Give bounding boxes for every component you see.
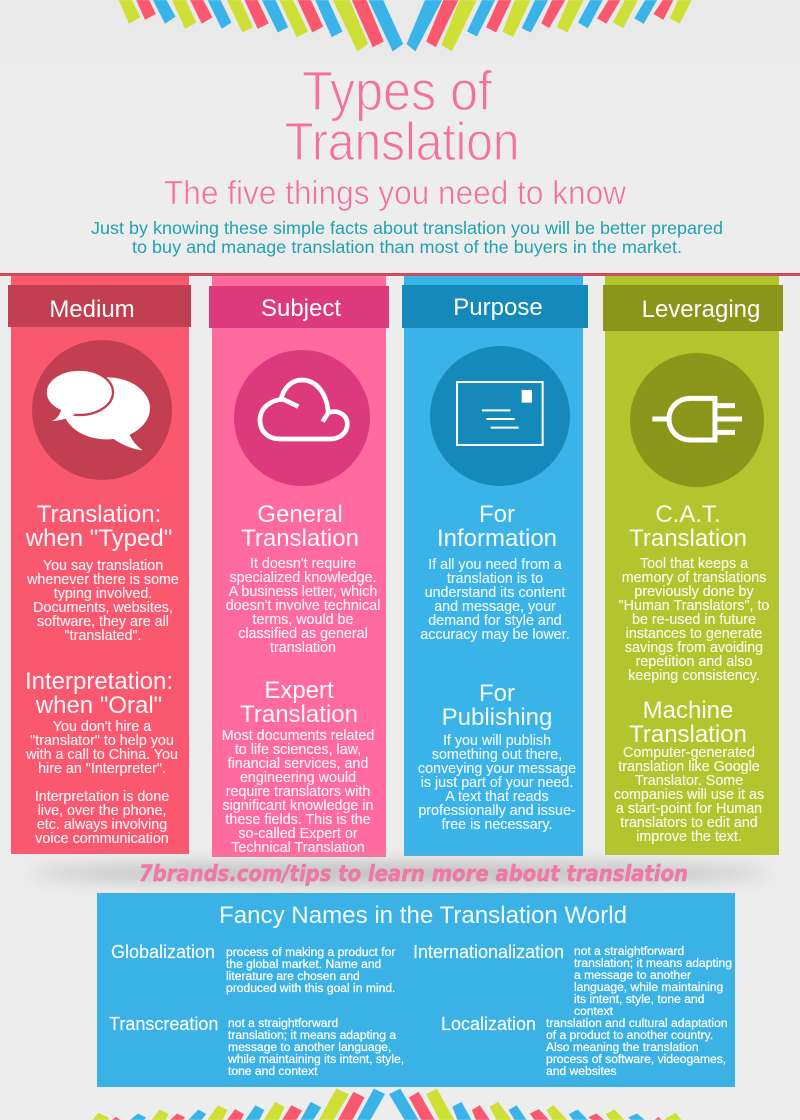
bottom ribbon decoration: [92, 1088, 682, 1120]
term: internationalization: language, while maintaining: [574, 980, 723, 994]
title: Types of: [302, 59, 492, 122]
term: globalization: the global market. Name and: [226, 957, 381, 971]
text: expert translation: so-called Expert or: [238, 826, 358, 842]
text: cat translation: previously done by: [634, 584, 754, 600]
text: expert translation: [222, 677, 374, 856]
term: transcreation: [109, 1014, 404, 1078]
term: internationalization: context: [574, 1004, 614, 1018]
text: expert translation: require translators with: [226, 784, 370, 800]
text: machine translation: Machine: [643, 697, 733, 724]
term: localization: of a product to another country.: [546, 1028, 713, 1042]
text: interpretation when oral: live, over the phone,: [38, 803, 166, 819]
text: translation when typed: "translated".: [65, 628, 141, 644]
text: cat translation: Tool that keeps a: [640, 556, 748, 572]
text: translation when typed: when "Typed": [25, 525, 172, 552]
term: globalization: Globalization: [111, 942, 215, 962]
text: for publishing: Publishing: [442, 704, 552, 731]
term: localization: Localization: [441, 1014, 536, 1034]
term: internationalization: its intent, style, tone and: [574, 992, 704, 1006]
text: machine translation: Computer-generated: [623, 745, 755, 761]
top ribbon decoration: [118, 0, 692, 52]
term: globalization: produced with this goal in mind.: [226, 981, 395, 995]
text: expert translation: Technical Translation: [231, 840, 365, 856]
text: interpretation when oral: voice communication: [35, 831, 169, 847]
text: translation when typed: [25, 501, 179, 644]
text: general translation: classified as general: [238, 626, 368, 642]
term: transcreation: Transcreation: [109, 1014, 218, 1034]
icon: cloud: [234, 350, 370, 486]
text: for publishing: conveying your message: [418, 761, 576, 777]
text: expert translation: to life sciences, law,: [235, 742, 361, 758]
text: for information: and message, your: [434, 599, 556, 615]
term: localization: translation and cultural adaptation: [546, 1016, 728, 1030]
text: expert translation: these fields. This is the: [225, 812, 371, 828]
text: for information: [420, 501, 570, 643]
text: for information: If all you need from a: [428, 557, 562, 573]
subtitle: The five things you need to know: [164, 174, 626, 211]
text: machine translation: Translator. Some: [635, 773, 743, 789]
panel: purpose: [402, 276, 588, 856]
text: translation when typed: software, they are all: [37, 614, 169, 630]
title: [284, 59, 520, 172]
text: cat translation: repetition and also: [636, 654, 752, 670]
heading: leveraging: [603, 285, 783, 331]
heading: purpose: Purpose: [453, 294, 543, 321]
text: general translation: A business letter, which: [229, 584, 377, 600]
text: machine translation: a start-point for Human: [616, 801, 762, 817]
text: machine translation: improve the text.: [636, 829, 742, 845]
text: general translation: It doesn't require: [250, 556, 356, 572]
text: interpretation when oral: with a call to China. You: [25, 747, 178, 763]
text: for information: For: [479, 501, 515, 528]
text: for information: translation is to: [447, 571, 543, 587]
text: expert translation: Most documents related: [222, 728, 374, 744]
term: localization: Also meaning the translation: [546, 1040, 699, 1054]
term: transcreation: tone and context: [228, 1064, 318, 1078]
text: expert translation: significant knowledge in: [222, 798, 374, 814]
text: for information: accuracy may be lower.: [420, 627, 570, 643]
panel: medium: [8, 276, 191, 854]
text: cat translation: keeping consistency.: [628, 668, 760, 684]
text: machine translation: Translation: [629, 721, 747, 748]
intro text: to buy and manage translation than most of the buyers in the market.: [132, 237, 682, 257]
text: translation when typed: whenever there is some: [26, 572, 179, 588]
term: transcreation: translation; it means adapting a: [228, 1028, 396, 1042]
text: machine translation: translators to edit and: [620, 815, 758, 831]
term: transcreation: while maintaining its intent, style,: [227, 1052, 404, 1066]
icon: plug: [630, 353, 764, 487]
text: for publishing: is just part of your need.: [421, 775, 573, 791]
term: globalization: [111, 942, 395, 995]
text: cat translation: savings from avoiding: [625, 640, 763, 656]
intro text: [91, 218, 723, 257]
text: for publishing: something out there,: [432, 747, 562, 763]
text: for publishing: professionally and issue-: [418, 803, 576, 819]
text: general translation: [226, 501, 380, 656]
text: for information: Information: [437, 525, 557, 552]
text: machine translation: companies will use it as: [614, 787, 764, 803]
text: expert translation: engineering would: [240, 770, 356, 786]
text: for information: understand its content: [425, 585, 565, 601]
text: general translation: doesn't involve technical: [226, 598, 380, 614]
text: interpretation when oral: "translator" to help you: [30, 733, 174, 749]
text: interpretation when oral: Interpretation:: [25, 668, 173, 695]
heading: leveraging: Leveraging: [642, 296, 760, 323]
term: localization: [441, 1014, 728, 1078]
heading: medium: Medium: [49, 296, 135, 323]
term: globalization: process of making a product for: [226, 945, 395, 959]
text: machine translation: translation like Google: [618, 759, 760, 775]
term: internationalization: a message to another: [574, 968, 691, 982]
text: general translation: translation: [270, 640, 336, 656]
term: localization: process of software, videogames,: [546, 1052, 726, 1066]
text: interpretation when oral: etc. always involving: [37, 817, 167, 833]
heading: medium: [8, 285, 191, 327]
text: interpretation when oral: [25, 668, 178, 847]
text: interpretation when oral: You don't hire a: [53, 719, 151, 735]
text: cat translation: "Human Translators", to: [619, 598, 769, 614]
panel: fancy names: [97, 893, 735, 1087]
text: for publishing: For: [479, 680, 515, 707]
text: cat translation: be re-used in future: [632, 612, 756, 628]
text: machine translation: [614, 697, 764, 845]
text: cat translation: instances to generate: [626, 626, 762, 642]
text: translation when typed: typing involved.: [54, 586, 152, 602]
term: internationalization: Internationalization: [413, 942, 564, 962]
text: cat translation: C.A.T.: [655, 501, 721, 528]
text: general translation: Translation: [241, 525, 359, 552]
text: cat translation: Translation: [629, 525, 747, 552]
text: general translation: terms, would be: [253, 612, 354, 628]
text: general translation: specialized knowledge.: [229, 570, 377, 586]
term: globalization: literature are chosen and: [226, 969, 360, 983]
heading: purpose: [402, 285, 588, 328]
panel: subject: [209, 276, 389, 857]
text: cat translation: memory of translations: [622, 570, 766, 586]
text: expert translation: Translation: [240, 701, 358, 728]
text: translation when typed: You say translation: [43, 558, 163, 574]
text: expert translation: financial services, and: [228, 756, 368, 772]
text: expert translation: Expert: [264, 677, 334, 704]
heading: subject: [209, 286, 389, 328]
term: internationalization: not a straightforward: [574, 944, 684, 958]
term: localization: and websites: [546, 1064, 617, 1078]
icon: envelope: [430, 346, 570, 486]
text: for publishing: A text that reads: [445, 789, 549, 805]
panel: leveraging: [603, 276, 783, 855]
text: for publishing: free is necessary.: [442, 817, 552, 833]
call to action link: 7brands.com/tips to learn more about translation: [139, 862, 688, 887]
text: interpretation when oral: Interpretation is done: [35, 789, 169, 805]
text: interpretation when oral: when "Oral": [35, 692, 162, 719]
icon: speech bubbles: [32, 340, 172, 480]
intro text: Just by knowing these simple facts about translation you will be better prepared: [91, 218, 723, 238]
term: internationalization: translation; it means adapting: [574, 956, 732, 970]
text: cat translation: [619, 501, 769, 684]
heading: subject: Subject: [261, 295, 341, 322]
term: transcreation: not a straightforward: [228, 1016, 338, 1030]
text: interpretation when oral: hire an "Interpreter".: [38, 761, 166, 777]
term: internationalization: [413, 942, 732, 1018]
text: for publishing: If you will publish: [443, 733, 551, 749]
text: for information: demand for style and: [428, 613, 562, 629]
text: general translation: General: [257, 501, 343, 528]
text: translation when typed: Documents, websites,: [33, 600, 173, 616]
title: Translation: [284, 112, 520, 172]
text: for publishing: [418, 680, 576, 833]
text: translation when typed: Translation:: [37, 501, 161, 528]
term: transcreation: message to another language,: [228, 1040, 391, 1054]
heading: fancy names: Fancy Names in the Translation World: [219, 902, 627, 929]
